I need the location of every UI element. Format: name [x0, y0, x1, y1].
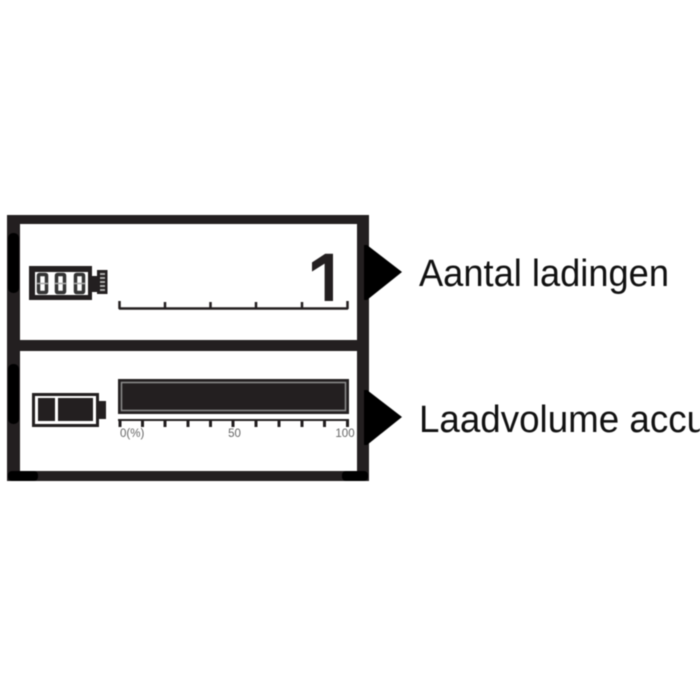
charge volume scale	[118, 420, 355, 440]
arrow: charge count	[364, 245, 402, 300]
icon: battery	[32, 393, 106, 427]
charge volume scale: 0(%)	[120, 428, 144, 440]
charge count scale	[119, 301, 348, 309]
charge volume scale: 100	[335, 428, 355, 440]
arrow: charge volume	[364, 390, 402, 445]
panel frame	[7, 215, 369, 481]
charge count value: 1	[305, 236, 352, 330]
label: charge count: Aantal ladingen	[419, 253, 669, 295]
charge volume scale: 50	[228, 428, 241, 440]
infographic: display legend	[6, 214, 700, 482]
icon: charge counter	[29, 266, 108, 300]
charge volume bar	[118, 379, 349, 414]
